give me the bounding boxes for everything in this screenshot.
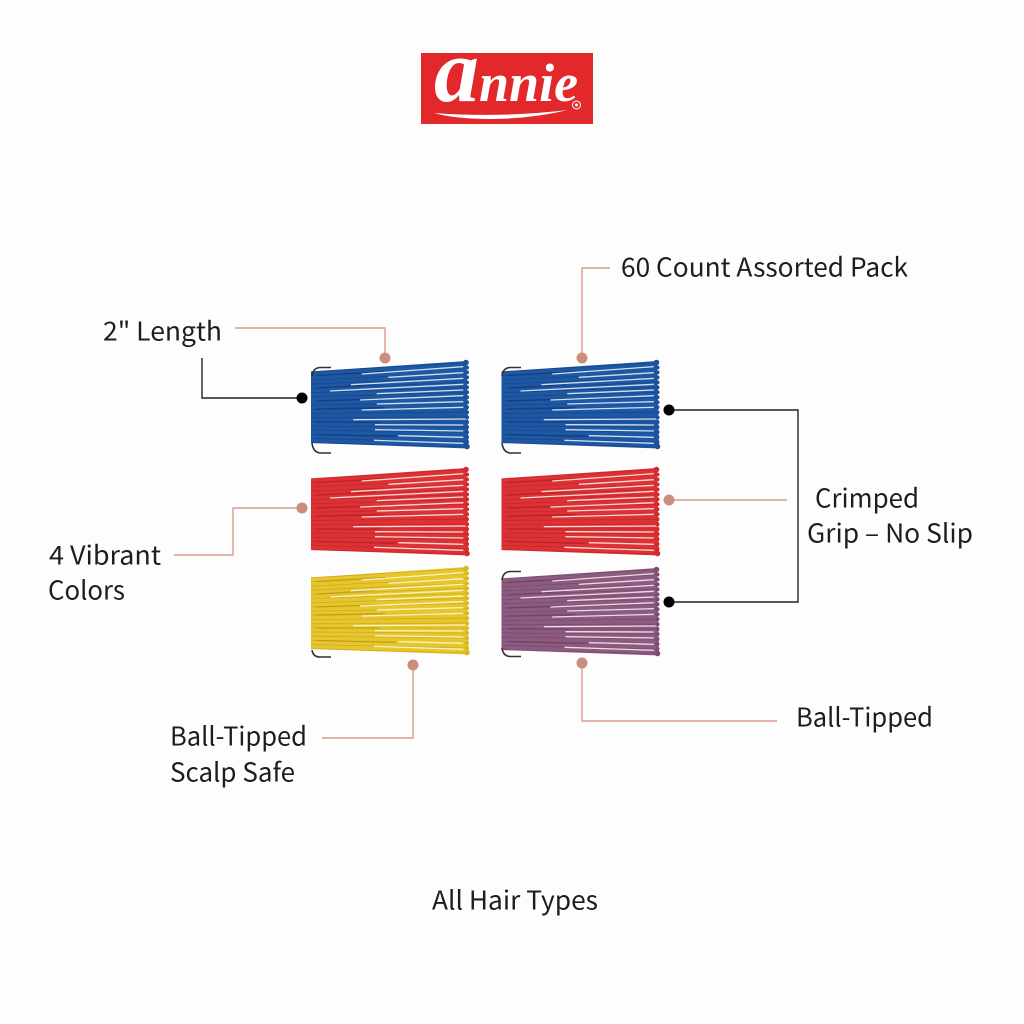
callout: 2" Length: 2" Length bbox=[103, 312, 222, 348]
bobby pins: blue, right bbox=[502, 360, 660, 449]
crimp brackets bbox=[312, 368, 521, 657]
callout: Crimped Grip – No Slip: Crimped bbox=[815, 478, 919, 516]
callout: Ball-Tipped Scalp Safe bbox=[170, 660, 418, 790]
callout: 4 Vibrant Colors bbox=[48, 502, 308, 608]
callout: 60 Count Assorted Pack bbox=[576, 248, 909, 364]
callout: 60 Count Assorted Pack: 60 Count Assorted Pack bbox=[621, 248, 909, 284]
callout: 4 Vibrant Colors: Colors bbox=[48, 570, 125, 608]
logo: Annie: annie bbox=[434, 22, 578, 121]
callout: Crimped Grip – No Slip: Grip – No Slip bbox=[807, 514, 973, 550]
callout: Crimped Grip – No Slip bbox=[664, 404, 973, 608]
callout: 4 Vibrant Colors: 4 Vibrant bbox=[49, 536, 161, 572]
bobby pins: yellow, left bbox=[311, 566, 470, 655]
bobby pins: purple, right bbox=[502, 567, 660, 656]
footer text: All Hair Types: All Hair Types bbox=[432, 880, 598, 918]
callout: 2" Length bbox=[103, 312, 390, 404]
bobby pins: red, right bbox=[502, 467, 660, 556]
callout: Ball-Tipped Scalp Safe: Ball-Tipped bbox=[170, 716, 307, 754]
bobby pins: blue, left bbox=[311, 360, 470, 449]
callout: Ball-Tipped: Ball-Tipped bbox=[796, 698, 933, 734]
callout: Ball-Tipped Scalp Safe: Scalp Safe bbox=[170, 752, 295, 790]
bobby pins: red, left bbox=[311, 467, 470, 556]
callout: Ball-Tipped bbox=[576, 658, 933, 734]
